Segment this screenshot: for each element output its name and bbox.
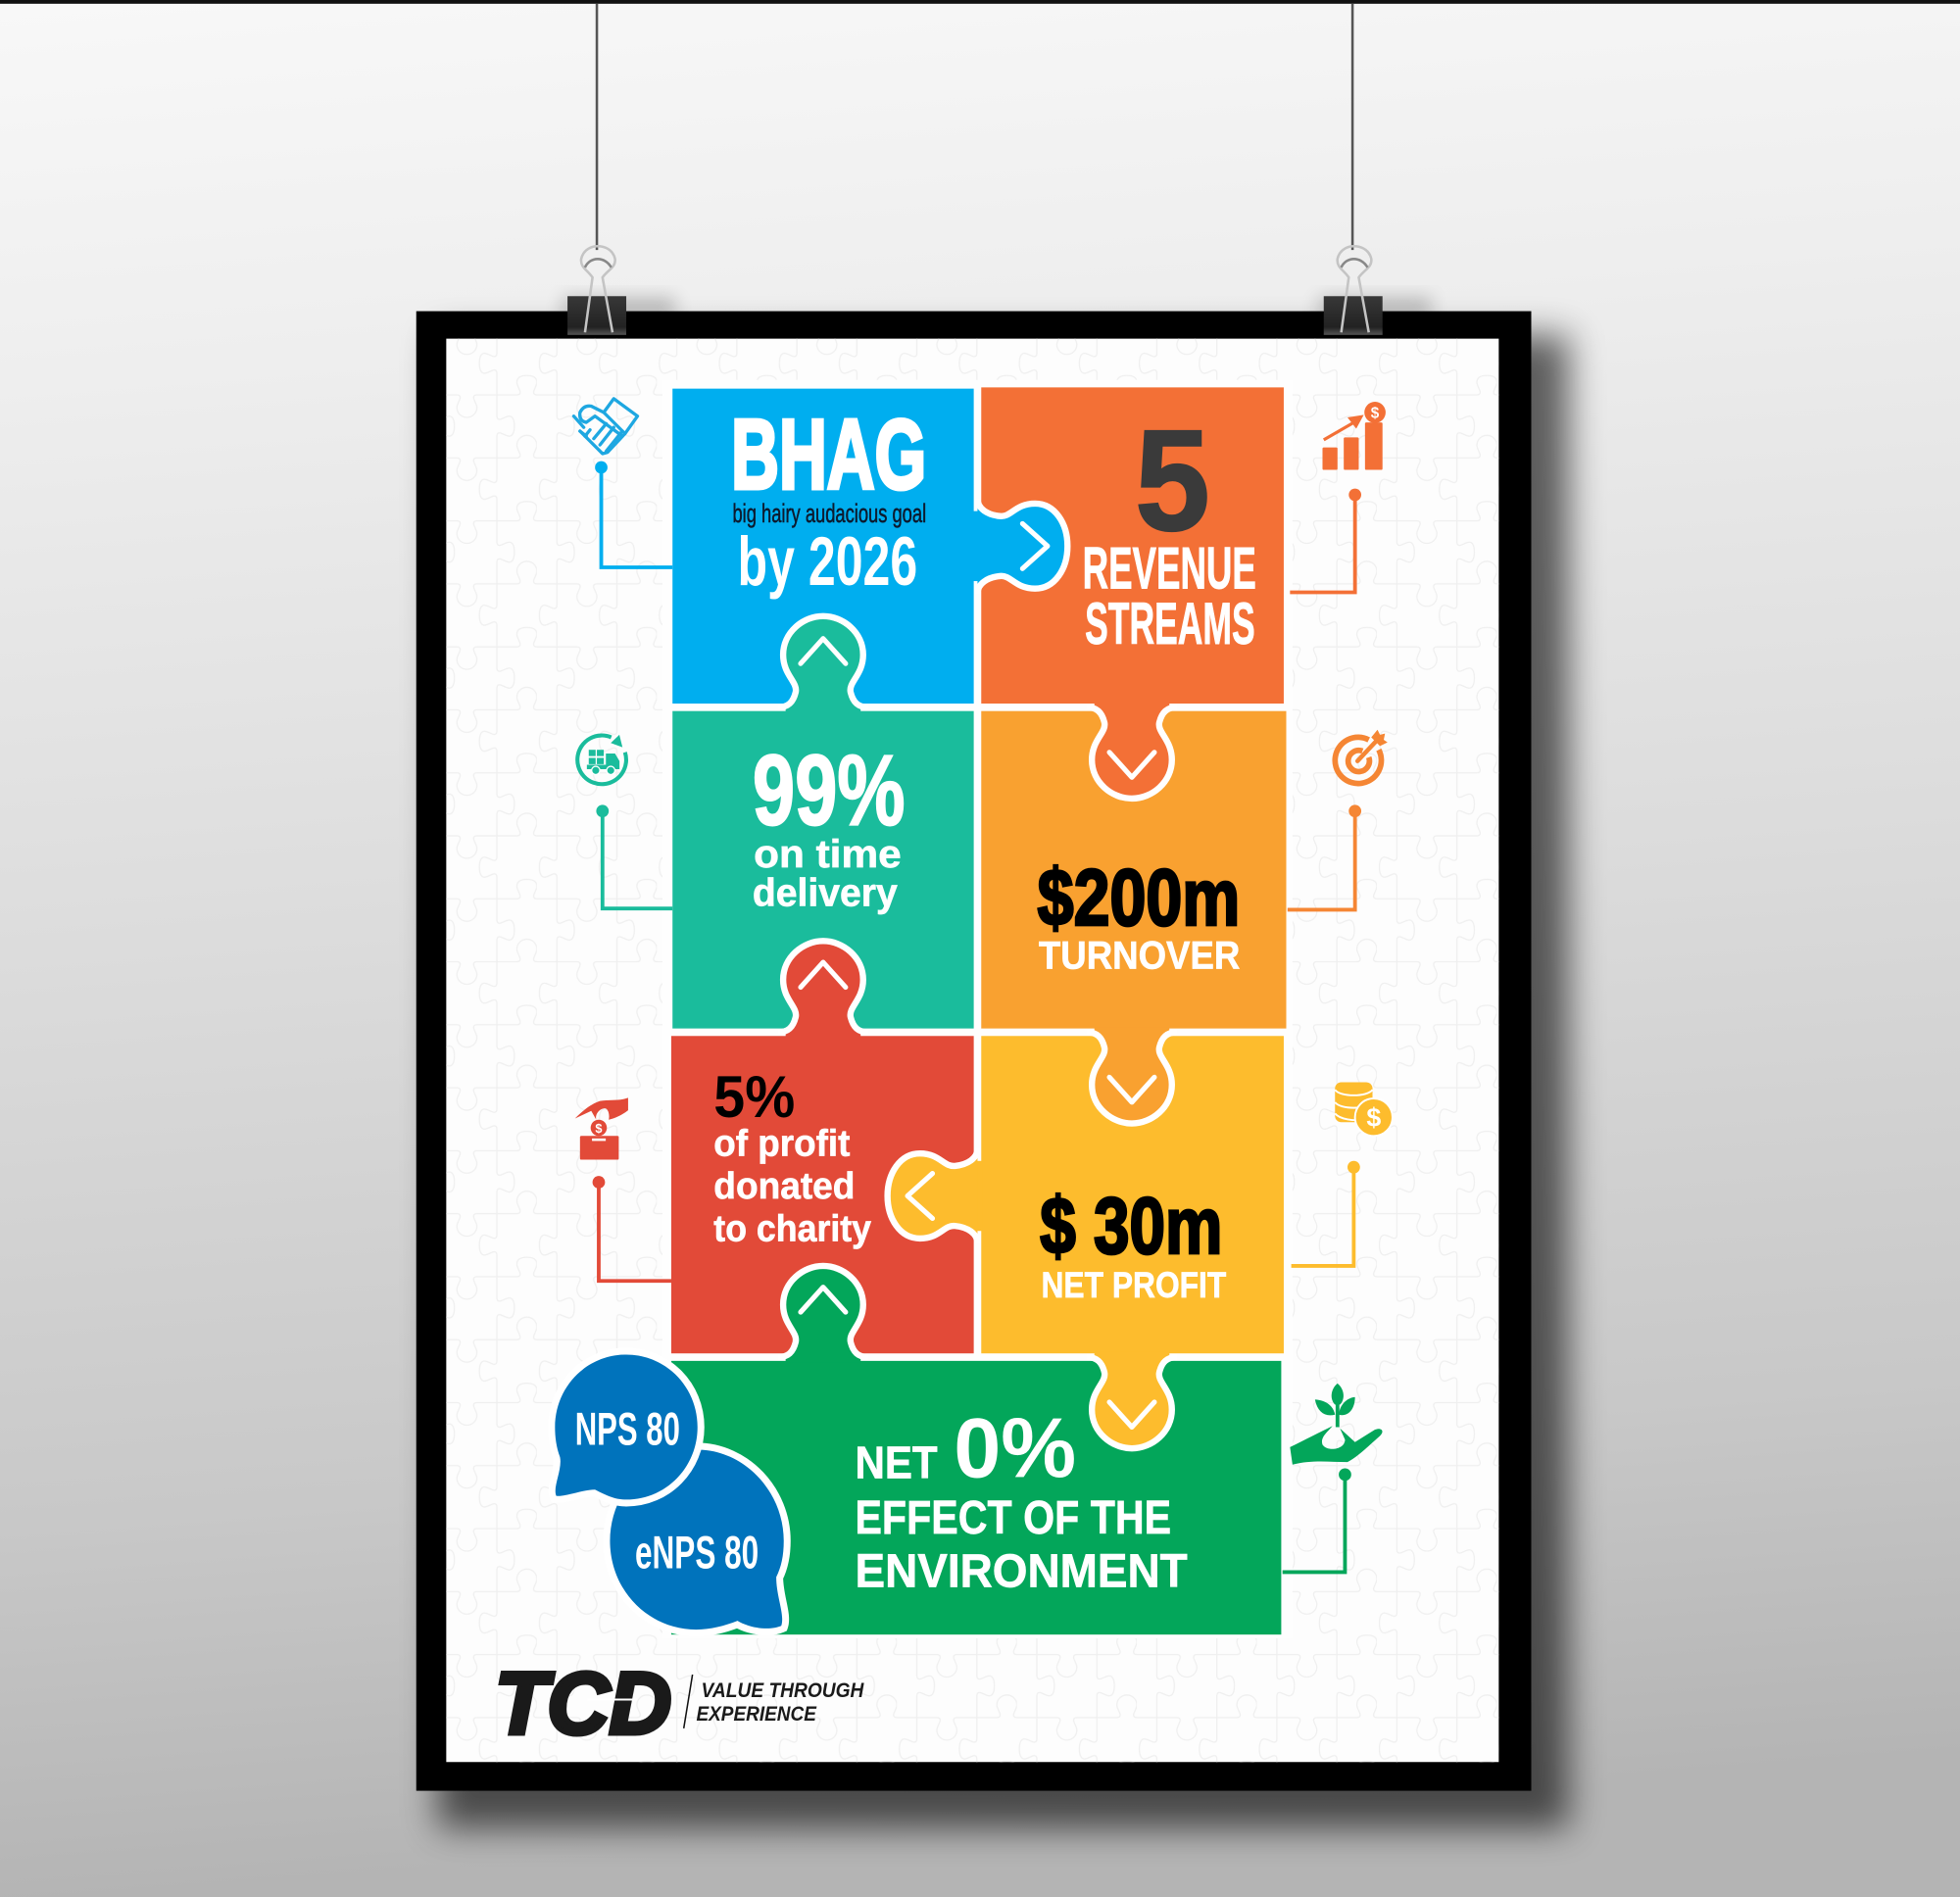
tab: orange into amber: [1087, 703, 1177, 799]
heading: BHAG: BHAG: [731, 401, 926, 511]
text: NET PROFIT: NET PROFIT: [1042, 1265, 1227, 1305]
piece: turnover amber: [981, 711, 1286, 1029]
top edge bar: [0, 0, 1960, 4]
connector: green: [1283, 1469, 1351, 1572]
text: eNPS 80: eNPS 80: [635, 1528, 759, 1580]
number: $200m: $200m: [1038, 853, 1240, 943]
tab: yellow into red: [888, 1148, 983, 1243]
logo wordmark: TCD: [495, 1654, 671, 1752]
connector: amber: [1288, 804, 1361, 909]
text: ENVIRONMENT: ENVIRONMENT: [855, 1545, 1188, 1598]
text: NPS 80: NPS 80: [575, 1403, 680, 1455]
text: STREAMS: STREAMS: [1085, 591, 1255, 657]
icon: donation hand and box: $: [595, 1121, 603, 1136]
number: 5: 5: [1135, 401, 1210, 561]
tagline line 2: EXPERIENCE: [696, 1703, 817, 1726]
piece: net profit yellow: [981, 1036, 1284, 1353]
number: 99%: 99%: [753, 735, 905, 847]
text: on time: on time: [754, 833, 902, 876]
binder clip right: [1324, 246, 1383, 335]
hanging wires: [597, 4, 1352, 250]
piece: environment green: [671, 1361, 1281, 1634]
tab: blue into orange: [972, 499, 1067, 594]
number: 0%: 0%: [954, 1400, 1076, 1495]
connector: red: [593, 1176, 671, 1281]
tab: red into teal: [778, 941, 868, 1038]
connector: blue: [595, 462, 672, 567]
text: donated: donated: [713, 1165, 855, 1207]
text: delivery: delivery: [753, 872, 898, 915]
tagline line 1: VALUE THROUGH: [702, 1679, 864, 1702]
bubble: NPS: [555, 1354, 698, 1499]
subtitle: big hairy audacious goal: big hairy audacious goal: [732, 499, 926, 528]
piece: delivery teal: [672, 711, 974, 1029]
text: by 2026: by 2026: [738, 523, 917, 600]
text: REVENUE: REVENUE: [1083, 536, 1256, 602]
icon: target: [1335, 730, 1388, 784]
piece: BHAG blue: [672, 389, 974, 704]
bubble: eNPS: [610, 1449, 784, 1629]
connector: orange: [1290, 489, 1361, 593]
icon: coin stack: [1335, 1082, 1393, 1136]
icon: revenue chart: [1322, 402, 1386, 470]
tab: green into red: [778, 1266, 868, 1362]
poster drop shadow: [437, 335, 1569, 1828]
connector: yellow: [1292, 1161, 1360, 1266]
number: $ 30m: $ 30m: [1040, 1182, 1222, 1271]
clip shadows on wall: [563, 298, 1431, 317]
icon: donation hand and box: [575, 1097, 628, 1160]
piece: charity red: [671, 1036, 974, 1353]
icon: delivery truck: [577, 735, 626, 784]
tab: amber into yellow: [1087, 1027, 1177, 1124]
icon: revenue chart: $: [1371, 406, 1380, 422]
poster black frame: [416, 312, 1532, 1791]
text: EFFECT OF THE: EFFECT OF THE: [855, 1491, 1171, 1544]
connector: teal: [596, 804, 672, 908]
logo: TCD: [495, 1654, 864, 1752]
piece: revenue streams orange: [981, 387, 1284, 704]
text: NET: NET: [855, 1437, 938, 1488]
icon: handshake: [573, 399, 638, 454]
number: 5%: 5%: [713, 1064, 795, 1130]
text: to charity: to charity: [713, 1207, 872, 1249]
text: TURNOVER: TURNOVER: [1039, 934, 1240, 977]
tab: yellow into green: [1087, 1352, 1177, 1448]
binder clip left: [567, 246, 626, 335]
icon: coin stack: $: [1366, 1103, 1381, 1133]
poster paper with jigsaw pattern: [446, 339, 1498, 1762]
tab: teal into blue: [778, 616, 868, 712]
text: of profit: of profit: [713, 1123, 851, 1165]
icon: plant in hand: [1290, 1384, 1383, 1465]
